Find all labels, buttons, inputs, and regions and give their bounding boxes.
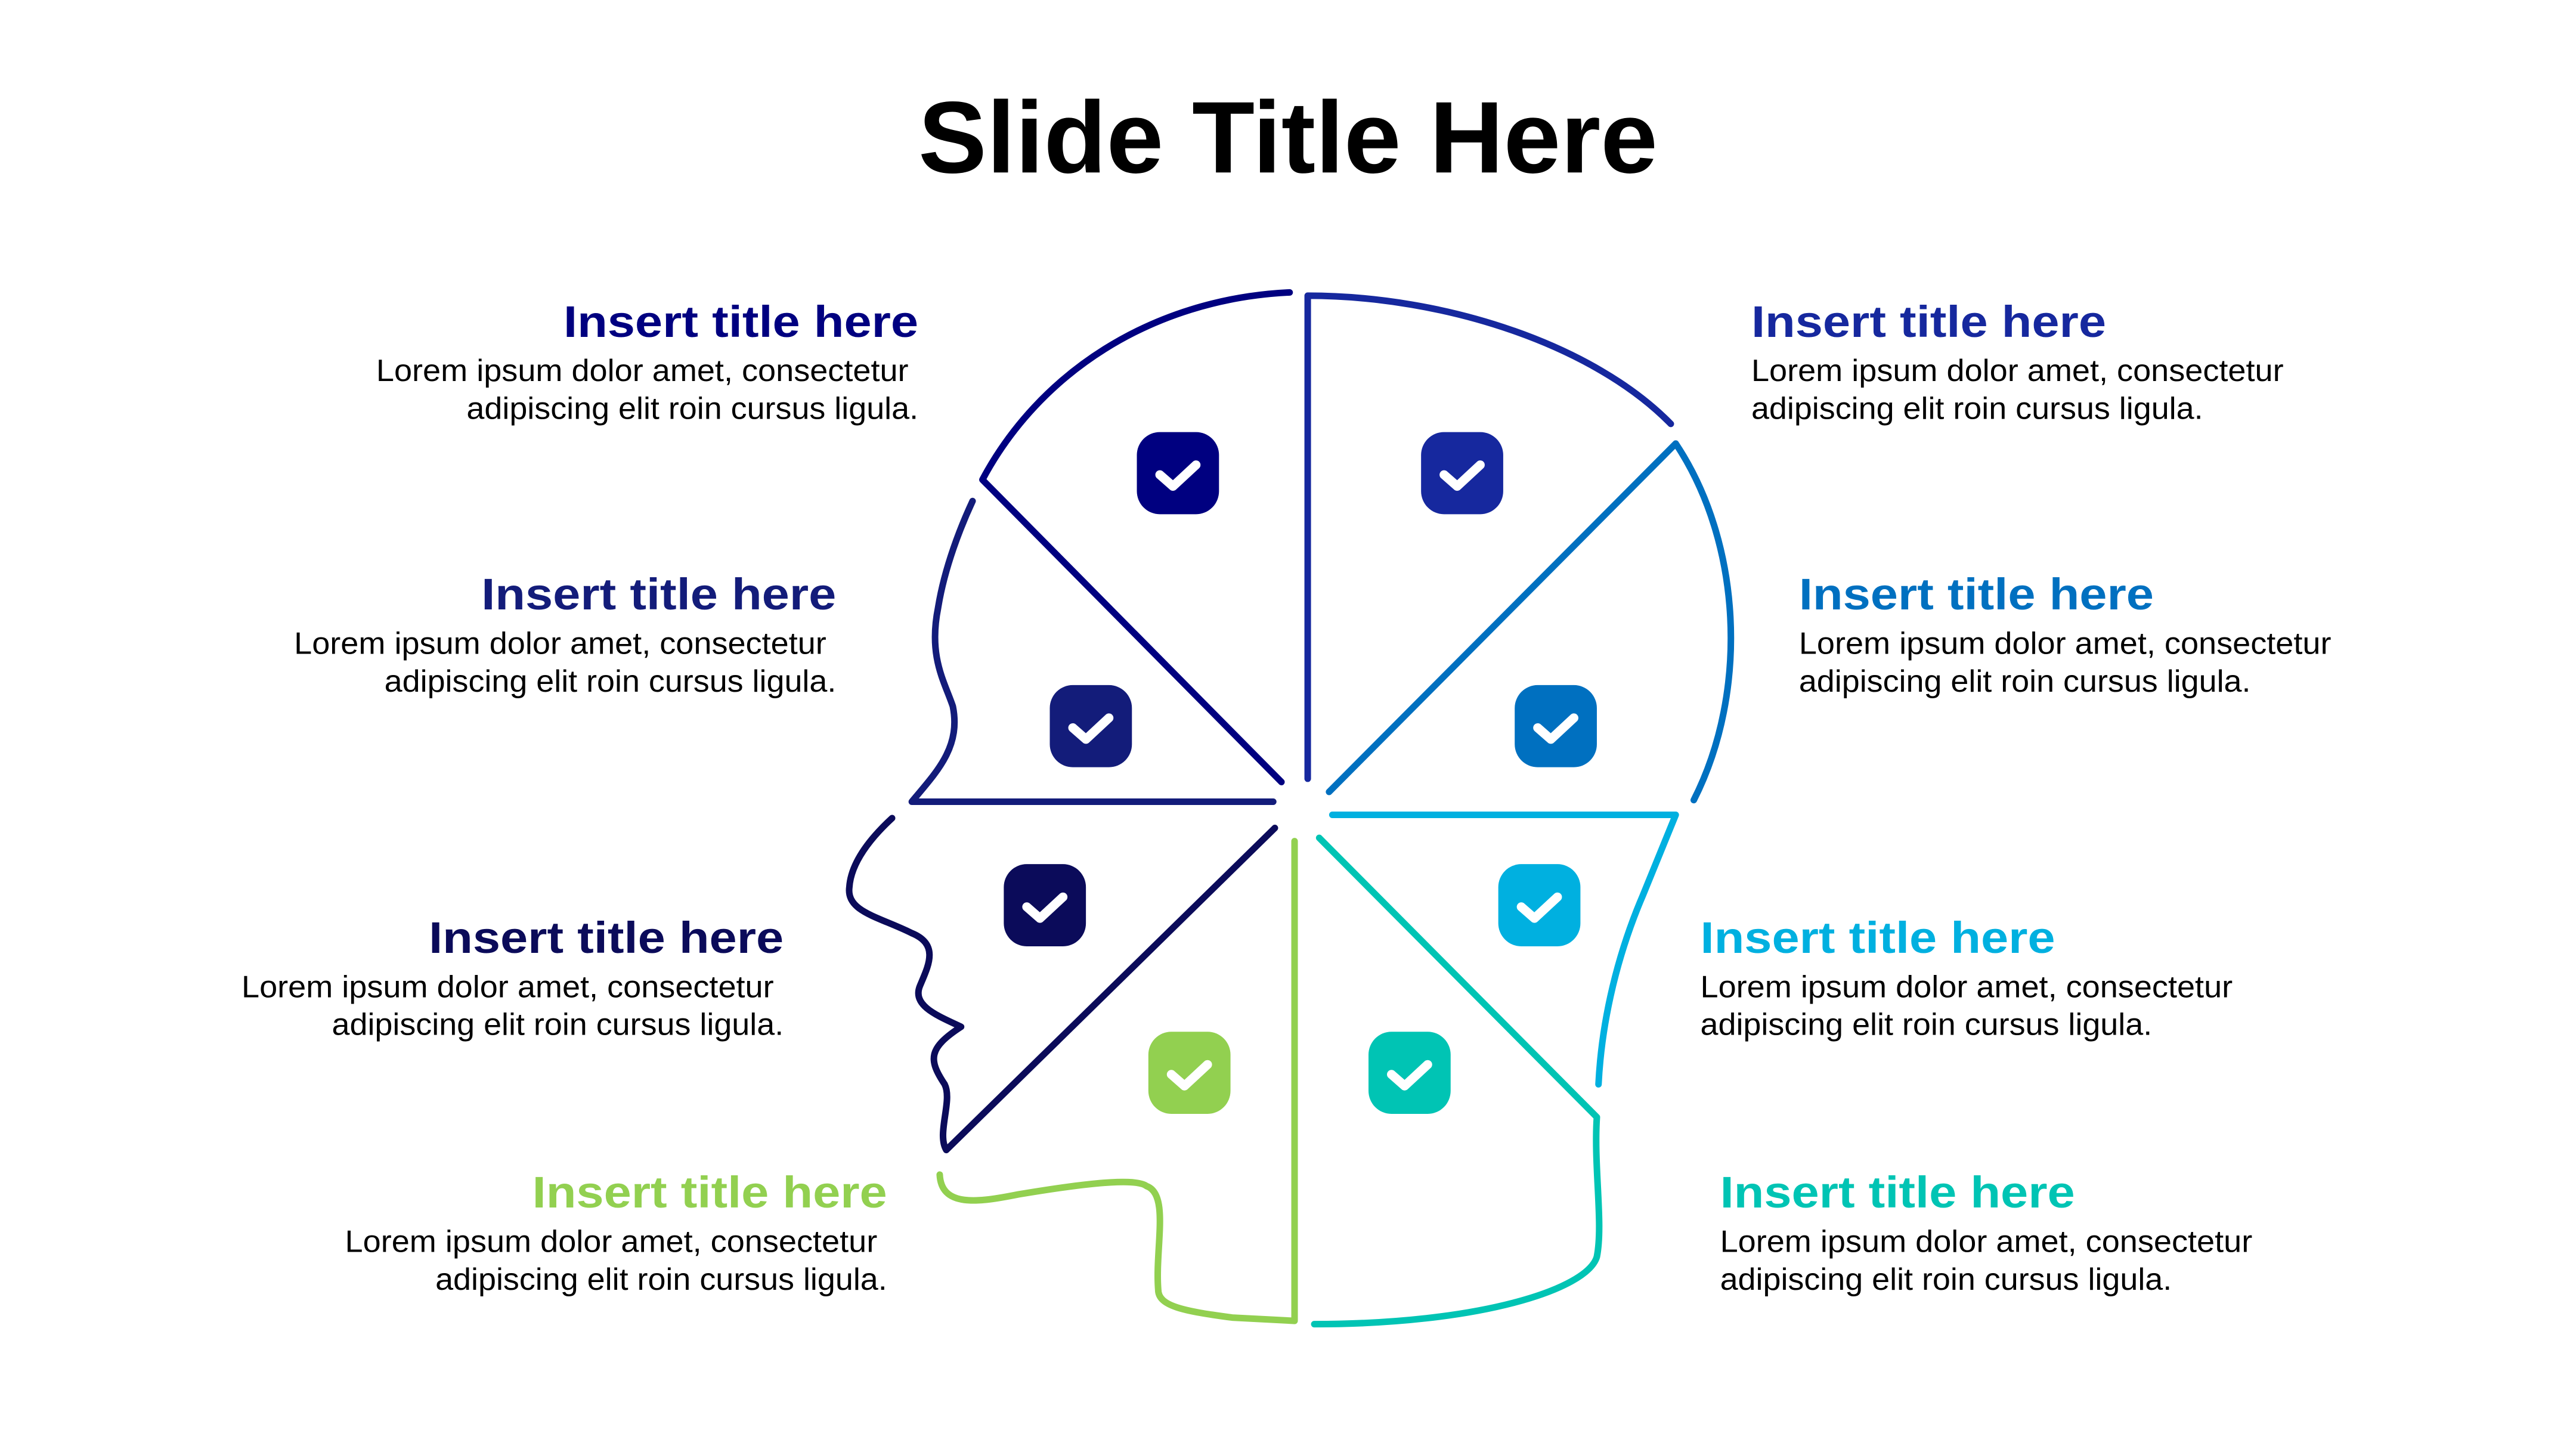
segment: top-left bbox=[983, 292, 1290, 782]
text block: lower-left: Insert title here bbox=[429, 913, 784, 962]
text block: lower-left: adipiscing elit roin cursus ligula. bbox=[332, 1008, 784, 1042]
text block: lower-left: Lorem ipsum dolor amet, consectetur bbox=[242, 970, 774, 1004]
text block: top-left: adipiscing elit roin cursus ligula. bbox=[466, 392, 918, 426]
icon: check 6 bbox=[1498, 864, 1580, 946]
text block: lower-right: Insert title here bbox=[1701, 913, 2055, 962]
text block: top-left: Lorem ipsum dolor amet, consectetur bbox=[376, 354, 909, 388]
text block: lower-right: Lorem ipsum dolor amet, consectetur bbox=[1701, 970, 2233, 1004]
text block: middle-right: Insert title here bbox=[1799, 569, 2154, 619]
head diagram bbox=[849, 292, 1731, 1324]
text block: bottom-left: Insert title here bbox=[532, 1168, 887, 1217]
text block: middle-right: adipiscing elit roin cursus ligula. bbox=[1799, 664, 2250, 699]
text block: top-right: adipiscing elit roin cursus ligula. bbox=[1751, 392, 2203, 426]
title: Slide Title Here bbox=[918, 80, 1658, 194]
text block: lower-right: adipiscing elit roin cursus ligula. bbox=[1701, 1008, 2152, 1042]
text block: middle-left bbox=[294, 569, 836, 699]
text block: lower-left bbox=[242, 913, 784, 1042]
text block: top-right: Lorem ipsum dolor amet, consectetur bbox=[1751, 354, 2284, 388]
icon: check 3 bbox=[1050, 685, 1132, 767]
segment: right upper bbox=[1329, 444, 1731, 800]
icon: check 8 bbox=[1368, 1032, 1451, 1114]
text block: bottom-right: adipiscing elit roin cursus ligula. bbox=[1720, 1262, 2172, 1297]
icon: check 1 bbox=[1137, 432, 1219, 514]
segment: left middle bbox=[912, 501, 1273, 801]
text block: middle-left: Insert title here bbox=[481, 569, 836, 619]
text block: bottom-left: Lorem ipsum dolor amet, consectetur bbox=[345, 1224, 877, 1259]
text block: bottom-right: Lorem ipsum dolor amet, consectetur bbox=[1720, 1224, 2252, 1259]
text block: middle-left: adipiscing elit roin cursus ligula. bbox=[385, 664, 836, 699]
icon: check 7 bbox=[1148, 1032, 1231, 1114]
icon: check 2 bbox=[1421, 432, 1503, 514]
segment: bottom-right bbox=[1314, 838, 1599, 1324]
text block: top-left: Insert title here bbox=[564, 297, 918, 346]
text block: top-right: Insert title here bbox=[1751, 297, 2106, 346]
icon: check 4 bbox=[1515, 685, 1597, 767]
segment: bottom bbox=[940, 841, 1295, 1321]
text block: middle-left: Lorem ipsum dolor amet, consectetur bbox=[294, 627, 826, 661]
text block: middle-right bbox=[1799, 569, 2331, 699]
segment: right bbox=[1332, 815, 1676, 1084]
icon: check 5 bbox=[1004, 864, 1086, 946]
segment: left lower bbox=[849, 818, 1275, 1150]
segment: top-right bbox=[1308, 296, 1671, 779]
text block: top-left bbox=[376, 297, 918, 426]
text block: bottom-right: Insert title here bbox=[1720, 1168, 2075, 1217]
text block: lower-right bbox=[1701, 913, 2233, 1042]
text block: top-right bbox=[1751, 297, 2284, 426]
text block: bottom-left bbox=[345, 1168, 887, 1297]
text block: bottom-right bbox=[1720, 1168, 2252, 1297]
text block: middle-right: Lorem ipsum dolor amet, consectetur bbox=[1799, 627, 2331, 661]
text block: bottom-left: adipiscing elit roin cursus ligula. bbox=[435, 1262, 887, 1297]
